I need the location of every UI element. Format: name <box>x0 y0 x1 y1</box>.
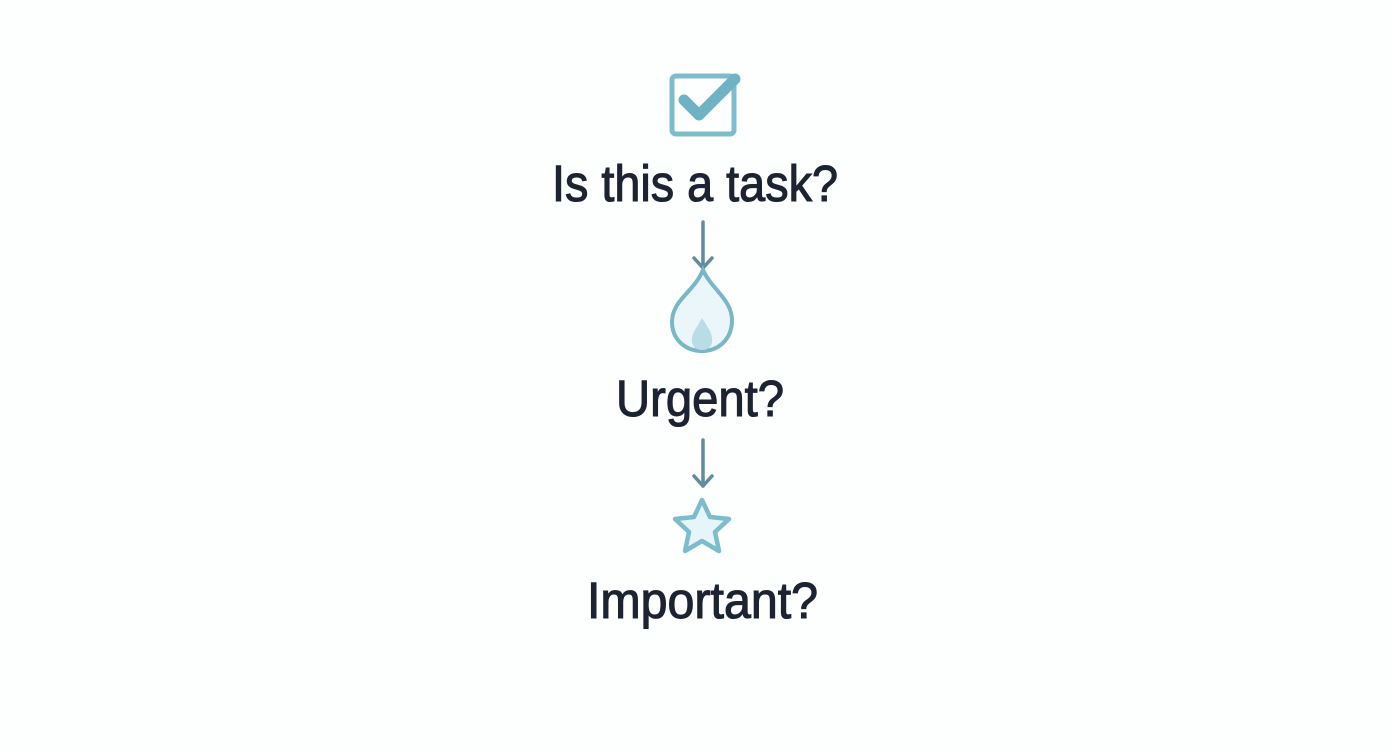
arrow 2 <box>694 440 712 486</box>
arrow 1 <box>694 222 712 268</box>
heading: Important?: Important? <box>587 572 818 629</box>
icon: checkbox <box>672 76 735 134</box>
icon: star <box>675 500 729 551</box>
heading: Urgent?: Urgent? <box>616 370 784 427</box>
heading: Is this a task?: Is this a task? <box>552 155 838 212</box>
icon: flame <box>672 270 732 351</box>
